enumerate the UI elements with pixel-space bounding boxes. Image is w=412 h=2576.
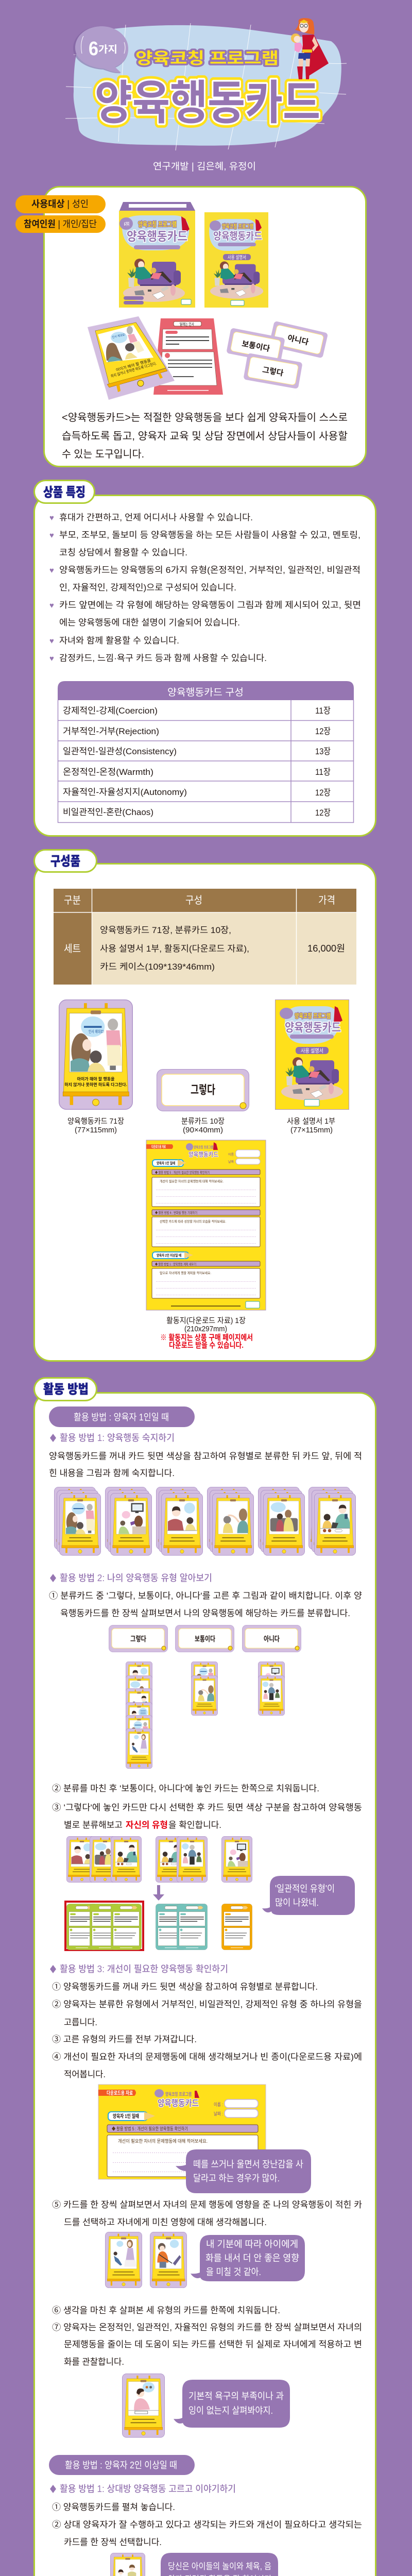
worksheet crop: 이름 : [214,2102,223,2107]
panel: intro [15,187,366,467]
table: card composition: 11장 [315,767,331,777]
method 2 steps 2-3 [52,1784,362,1830]
product: sample cards [88,316,328,400]
item: classification card: 그렇다 [191,1083,215,1096]
heading tab: 활동 방법 [34,1378,97,1400]
two parents method 1 steps: 카드를 한 장씩 선택합니다. [64,2537,162,2547]
speech bubble: 당신은 아이들의: 당신은 아이들의 놀이와 체육, 음 [168,2562,271,2571]
speech bubble: 기본적 욕구: 기본적 욕구의 부족이나 과 [188,2391,284,2401]
method 2 step 1: 육행동카드를 한 장씩 살펴보면서 나의 양육행동에 해당하는 카드를 분류합니다. [60,1608,350,1618]
worksheet caption: (210x297mm) [184,1325,227,1333]
worksheet caption: 다운로드 받을 수 있습니다. [169,1341,244,1350]
panel: features [34,480,376,836]
card: 그렇다: 그렇다 [130,1635,146,1643]
feature list [49,513,361,663]
worksheet part 1: 양육자 1인 일때 [157,1161,175,1165]
item: manual: (77×115mm) [290,1126,333,1134]
product: card box: 6가지 [124,221,129,227]
heading tab: 상품 특징: 상품 특징 [43,485,85,500]
method 2 steps 2-3: 을 확인합니다. [168,1820,221,1830]
speech bubble: 떼를 쓰거나: 달라고 하는 경우가 많아. [193,2173,280,2183]
stack 6 [308,1487,356,1555]
method 3 steps 1-4: 고릅니다. [64,2018,97,2027]
method 2 step 1: ① 분류카드 중 '그렇다, 보통이다, 아니다'를 고른 후 그림과 같이 배치합니다. 이후 양 [49,1591,362,1601]
worksheet caption [160,1316,253,1350]
method 3 steps 6-7: ⑥ 생각을 마친 후 살펴본 세 유형의 카드를 한쪽에 치워둡니다. [52,2306,280,2315]
method 3 steps 6-7: 화를 관찰합니다. [64,2357,124,2367]
feature list: ♥ [49,531,54,540]
method 3 steps 6-7: ⑦ 양육자는 온정적인, 일관적인, 자율적인 유형의 카드를 한 장씩 살펴보면서 자녀의 [52,2323,362,2332]
classification card: 그렇다: 그렇다 [262,366,284,378]
worksheet crop: 양육자 1인 일때 [113,2113,139,2120]
table: card composition: 거부적인-거부(Rejection) [63,726,159,736]
panel: how to use [34,1378,376,2576]
worksheet crop: 양육행동카드 [158,2098,199,2108]
card: 그렇다 [109,1625,168,1652]
two parents method 1 steps: ② 상대 양육자가 잘 수행하고 있다고 생각되는 카드와 개선이 필요하다고 생각되는 [52,2520,362,2530]
stack 4 [207,1487,254,1555]
classification card: 보통이다 [226,328,285,364]
method 2 step 1 [49,1591,362,1618]
badge: 사용대상: 사용대상 | 성인 [31,199,89,209]
method 3 steps 6-7: 문제행동을 줄이는 데 도움이 되는 카드를 선택한 뒤 실제로 자녀에게 적용하고 변 [64,2340,362,2349]
card front tilted: 아이가 해야 할 행동을 [115,358,151,372]
method 3 steps 1-4: ④ 개선이 필요한 자녀의 문제행동에 대해 생각해보거나 빈 종이(다운로드용 자료)에 [52,2052,362,2062]
worksheet crop: 날짜 : [214,2111,223,2116]
table: card composition [58,681,354,822]
card front tilted: 인사 제대로! [112,332,126,340]
pill: two parents [49,2455,195,2475]
table: card composition: 12장 [315,788,331,798]
item: behavior card: 양육행동카드 71장 [67,1117,124,1126]
description text: 수 있는 도구입니다. [62,448,144,460]
item: worksheet: 양육코칭 프로그램 [194,1145,213,1149]
speech bubble: 일관적인 유형: 많이 나왔네. [275,1897,319,1908]
method 1 heading: 활용 방법 1: 양육행동 숙지하기 [60,1433,175,1443]
cards back row [66,1904,252,1950]
method 3 step 5 [52,2200,362,2227]
speech bubble: 내 기분에: 을 미칠 것 같아. [206,2267,261,2277]
method 1 text [49,1451,362,1478]
table: set and price: 구성 [185,894,202,906]
cards front row [66,1836,252,1883]
table: card composition: 11장 [315,706,331,716]
table: set and price: 세트 [64,943,81,955]
main title: 양육행동카드: 양육행동카드 [95,77,320,129]
feature list: 카드 앞면에는 각 유형에 해당하는 양육행동이 그림과 함께 제시되어 있고, 뒷면 [59,600,361,610]
table: set and price: 카드 케이스(109*139*46mm) [100,962,215,972]
method 2 steps 2-3: 자신의 유형 [126,1820,168,1830]
arrow down [153,1885,164,1901]
speech bubble: 기본적 욕구 [174,2380,290,2428]
worksheet crop [98,2084,266,2179]
table: set and price: 양육행동카드 71장, 분류카드 10장, [100,925,231,935]
item: worksheet [146,1140,266,1310]
worksheet part 2: 선택한 카드에 따라 성장할 자녀의 모습을 적어보세요. [160,1219,226,1224]
item: manual: 사용 설명서 1부 [287,1117,335,1126]
pill: one parent [49,1406,195,1427]
speech bubble: 6가지: 가지 [98,44,117,55]
heading tab: 구성품 [34,850,97,872]
speech bubble: 6가지 [73,26,128,73]
table: set and price [54,889,356,985]
credits: 연구개발: 연구개발 | 김은혜, 유정이 [153,161,256,172]
worksheet part 3: 앞으로 자녀에게 행할 계획을 적어보세요. [160,1270,211,1275]
feature list: 인, 자율적인, 강제적인)으로 구성되어 있습니다. [59,583,236,592]
badge: 사용대상 [15,195,106,213]
item: behavior card [59,1000,132,1134]
classification cards row [109,1625,301,1652]
table: card composition: 양육행동카드 구성 [167,687,244,698]
method 3 steps 1-4: ② 양육자는 분류한 유형에서 거부적인, 비일관적인, 강제적인 유형 중 하나의 유형을 [52,1999,362,2009]
stack 5 [258,1487,305,1555]
feature list: 휴대가 간편하고, 언제 어디서나 사용할 수 있습니다. [59,513,253,522]
worksheet part 3: 양육자 2인 이상일 때 [157,1253,181,1258]
card: 보통이다: 보통이다 [195,1635,215,1643]
sorted cards: column 보통이다 [191,1662,218,1716]
feature list: 양육행동카드는 양육행동의 6가지 유형(온정적인, 거부적인, 일관적인, 비일관적 [59,565,360,575]
classification card: 아니다: 아니다 [287,334,310,347]
classification card: 그렇다 [243,353,303,389]
card: play and sports [110,2553,145,2576]
worksheet part 1: 개선이 필요한 자녀의 문제행동에 대해 적어보세요. [160,1179,224,1183]
card stacks by type [54,1487,356,1555]
subtitle: 양육코칭 프로그램: 양육코칭 프로그램 [135,49,279,67]
worksheet caption: ※ 활동지는 상품 구매 페이지에서 [160,1333,253,1342]
method 1 text: 힌 내용을 그림과 함께 숙지합니다. [49,1468,175,1478]
product: manual: 사용 설명서 [228,255,246,261]
method 3 step 5: 드를 선택하고 자녀에게 미친 영향에 대해 생각해봅니다. [64,2217,267,2227]
feature list: 자녀와 함께 활용할 수 있습니다. [59,636,179,646]
main title: 양육행동카드: 양육행동카드 [95,77,320,129]
cards: mood-based parenting [105,2232,187,2288]
worksheet part 1: ◆ 활용 방법 5 : 개선이 필요한 양육행동 확인하기 [155,1170,210,1175]
table: set and price: 구분 [64,895,81,906]
feature list: ♥ [49,566,54,575]
speech bubble: 당신은 아이들의 [151,2553,278,2576]
worksheet part 1 [152,1160,260,1207]
badge: 참여인원: 참여인원 | 개인/집단 [24,219,97,229]
two parents method 1 steps: ① 양육행동카드를 펼쳐 놓습니다. [52,2502,175,2512]
item: behavior card: 하지 않거나 못하면 하도록 다그친다. [64,1082,127,1087]
hero blob [74,25,341,146]
worksheet crop: 다운로드용 자료 [107,2090,133,2096]
speech bubble: 떼를 쓰거나 [176,2149,311,2193]
product: card box: 양육코칭 프로그램 [138,221,177,228]
method 3 heading: 활용 방법 3: 개선이 필요한 양육행동 확인하기 [60,1964,228,1974]
table: set and price: 사용 설명서 1부, 활동지(다운로드 자료), [100,944,249,954]
heading tab: 구성품: 구성품 [50,854,80,869]
item: behavior card: 아이가 해야 할 행동을 [77,1076,115,1081]
heading tab: 상품 특징 [34,480,95,503]
card: 보통이다 [175,1625,234,1652]
item: classification card: (90×40mm) [183,1126,223,1134]
product: card box: 양육행동카드 [127,230,187,244]
worksheet part 2: ◆ 활용 방법 6 : 변화될 행동 기대하기 [155,1210,197,1215]
speech bubble: 일관적인 유형 [262,1876,355,1915]
item: behavior card: 인사 제대로! [89,1029,104,1034]
stack 2 [105,1487,152,1555]
speech bubble: 내 기분에: 내 기분에 따라 아이에게 [206,2239,298,2249]
classification card: 보통이다: 보통이다 [241,340,271,353]
feature list: 에는 양육행동에 대한 설명이 기술되어 있습니다. [59,618,240,628]
hero title block [65,18,347,150]
item: manual: 양육코칭 프로그램 [295,1012,331,1020]
sorted cards: column 그렇다 [126,1662,152,1769]
table: card composition: 온정적인-온정(Warmth) [63,767,153,777]
item: behavior card: (77×115mm) [75,1126,117,1134]
speech bubble: 내 기분에 [191,2235,305,2281]
item: worksheet: 다운로드용 자료 [151,1144,166,1149]
sorted cards: column 아니다 [258,1662,285,1716]
table: card composition: 강제적인-강제(Coercion) [63,706,158,716]
method 3 steps 1-4: ③ 고른 유형의 카드를 전부 가져갑니다. [52,2035,197,2044]
card front tilted [88,316,175,400]
product: manual: 양육행동카드 [213,230,262,242]
item: classification card: 분류카드 10장 [181,1117,225,1126]
feature list: 감정카드, 느낌·욕구 카드 등과 함께 사용할 수 있습니다. [59,653,267,663]
worksheet part 3 [152,1252,260,1298]
feature list: 코칭 상담에서 활용할 수 있습니다. [59,548,187,557]
item: worksheet: 날짜 : [228,1160,236,1164]
two parents method 1 steps [52,2502,362,2547]
method 3 steps 6-7 [52,2306,362,2367]
worksheet part 2 [152,1210,260,1247]
card back: red: 달래는 인사 [180,321,194,327]
worksheet crop: ◆ 활용 방법 5 : 개선이 필요한 양육행동 확인하기 [112,2126,188,2131]
stack 3 [156,1487,203,1555]
method 1 text: 양육행동카드를 꺼내 카드 뒷면 색상을 참고하여 유형별로 분류한 뒤 카드 앞, 뒤에 적 [49,1451,362,1461]
pill: two parents: 활용 방법 : 양육자 2인 이상일 때 [65,2460,177,2470]
table: set and price: 가격 [318,894,335,906]
product: manual [204,212,268,308]
table: card composition: 비일관적인-혼란(Chaos) [63,807,153,817]
product: manual: 양육코칭 프로그램 [222,223,253,230]
item: worksheet: 이름 : [228,1153,236,1157]
speech bubble: 기본적 욕구: 잉이 없는지 살펴봐야지. [188,2405,273,2416]
card: 아니다: 아니다 [264,1635,280,1643]
item: worksheet: 양육행동카드 [188,1150,218,1158]
icon: superhero mother holding child [291,18,329,79]
badge: 참여인원 [15,215,106,233]
product: card box [119,202,195,308]
table: card composition: 12장 [315,726,331,736]
card front tilted: 하지 않거나 못하면 하도록 다그친다. [110,361,157,379]
description text: 습득하도록 돕고, 양육자 교육 및 상담 장면에서 상담사들이 사용할 [62,430,348,442]
feature list: ♥ [49,601,54,610]
speech bubble: 일관적인 유형: '일관적인 유형'이 [275,1884,335,1894]
item: manual: 양육행동카드 [285,1021,341,1034]
speech bubble: 내 기분에: 화를 내서 더 안 좋은 영향 [205,2253,299,2263]
method 2 steps 2-3: 별로 분류해보고 [64,1820,123,1830]
table: card composition: 자율적인-자율성지지(Autonomy) [63,787,187,797]
table: card composition: 일관적인-일관성(Consistency) [63,747,177,756]
panel: components [34,850,376,1361]
speech bubble: 떼를 쓰거나: 떼를 쓰거나 울면서 장난감을 사 [193,2159,303,2170]
pill: one parent: 활용 방법 : 양육자 1인일 때 [74,1412,169,1422]
card back: red [153,318,223,395]
description text [62,412,348,460]
item: manual: 사용 설명서 [301,1047,323,1054]
method 3 steps 1-4: ① 양육행동카드를 꺼내 카드 뒷면 색상을 참고하여 유형별로 분류합니다. [52,1982,318,1992]
method 2 steps 2-3: ③ '그렇다'에 놓인 카드만 다시 선택한 후 카드 뒷면 색상 구분을 참고하여 양육행동 [52,1803,362,1812]
stack 1 [54,1487,101,1555]
card: 아니다 [242,1625,301,1652]
method 2 heading: 활용 방법 2: 나의 양육행동 유형 알아보기 [60,1573,212,1583]
speech bubble: 6가지: 6 [89,38,98,60]
description text: <양육행동카드>는 적절한 양육행동을 보다 쉽게 양육자들이 스스로 [62,412,348,423]
worksheet part 3: ◆ 활용 방법 1 : 양육행동 계획 세우기 [155,1262,196,1266]
feature list: 부모, 조부모, 돌보미 등 양육행동을 하는 모든 사람들이 사용할 수 있고, 멘토링, [59,530,360,540]
method 3 steps 1-4: 적어봅니다. [64,2070,106,2079]
card: basic needs [122,2374,165,2437]
feature list: ♥ [49,654,54,663]
classification card: 아니다 [269,321,328,359]
worksheet crop: 양육코칭 프로그램 [165,2091,192,2097]
worksheet caption: 활동지(다운로드 자료) 1장 [166,1316,246,1325]
item: manual [275,999,349,1134]
method 2 steps 2-3: ② 분류를 마친 후 '보통이다, 아니다'에 놓인 카드는 한쪽으로 치워둡니다. [52,1784,319,1793]
two parents method 1 heading: 활용 방법 1: 상대방 양육행동 고르고 이야기하기 [60,2484,236,2494]
highlight box: 일관적인 [65,1902,143,1950]
heading tab: 활동 방법: 활동 방법 [43,1382,89,1397]
table: set and price: 16,000원 [307,943,345,954]
feature list: ♥ [49,514,54,522]
item: classification card [157,1070,249,1134]
method 3 steps 1-4 [52,1982,362,2079]
worksheet crop: 개선이 필요한 자녀의 문제행동에 대해 적어보세요. [118,2138,208,2144]
method 3 step 5: ⑤ 카드를 한 장씩 살펴보면서 자녀의 문제 행동에 영향을 준 나의 양육행동이 적힌 카 [52,2200,362,2210]
table: card composition: 12장 [315,808,331,818]
feature list: ♥ [49,637,54,646]
table: card composition: 13장 [315,747,331,756]
